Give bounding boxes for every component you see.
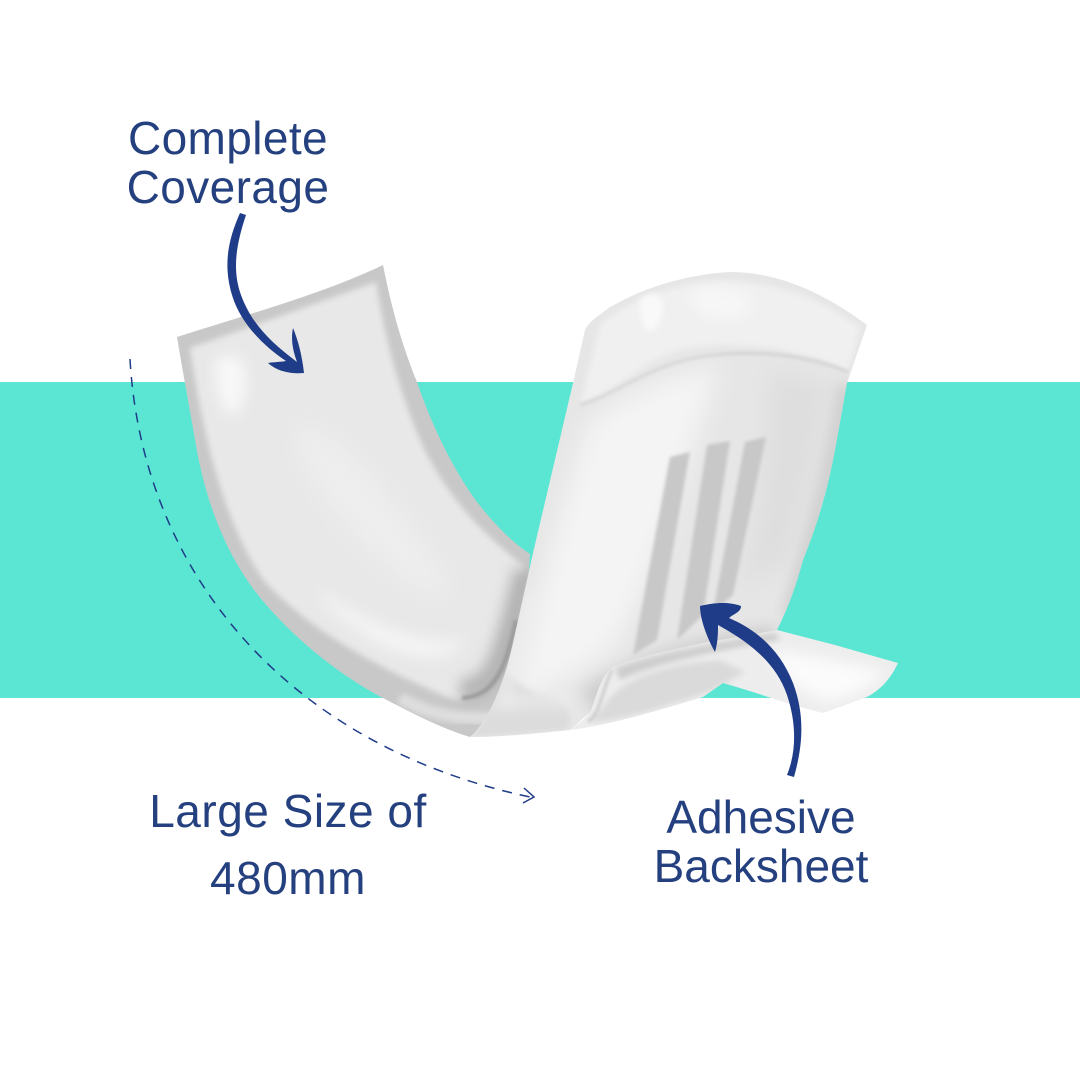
label: adhesive backsheet [654, 791, 868, 892]
tail flap [570, 630, 898, 730]
label: complete coverage: Complete [128, 112, 328, 164]
label: adhesive backsheet: Backsheet [654, 840, 868, 892]
arrow: adhesive backsheet [700, 603, 801, 777]
product: folded pad illustration [129, 213, 898, 804]
label: large size: Large Size of [149, 785, 427, 837]
dashed size arrow [130, 359, 534, 803]
label: adhesive backsheet: Adhesive [666, 791, 856, 843]
adhesive strips [633, 437, 766, 655]
teal band [0, 382, 1080, 698]
right wing of pad [470, 272, 867, 737]
label: large size: 480mm [210, 852, 366, 904]
left wing of pad [177, 265, 530, 737]
label: complete coverage: Coverage [127, 161, 329, 213]
label: large size [149, 785, 427, 904]
arrow: complete coverage [227, 213, 304, 373]
label: complete coverage [127, 112, 329, 213]
